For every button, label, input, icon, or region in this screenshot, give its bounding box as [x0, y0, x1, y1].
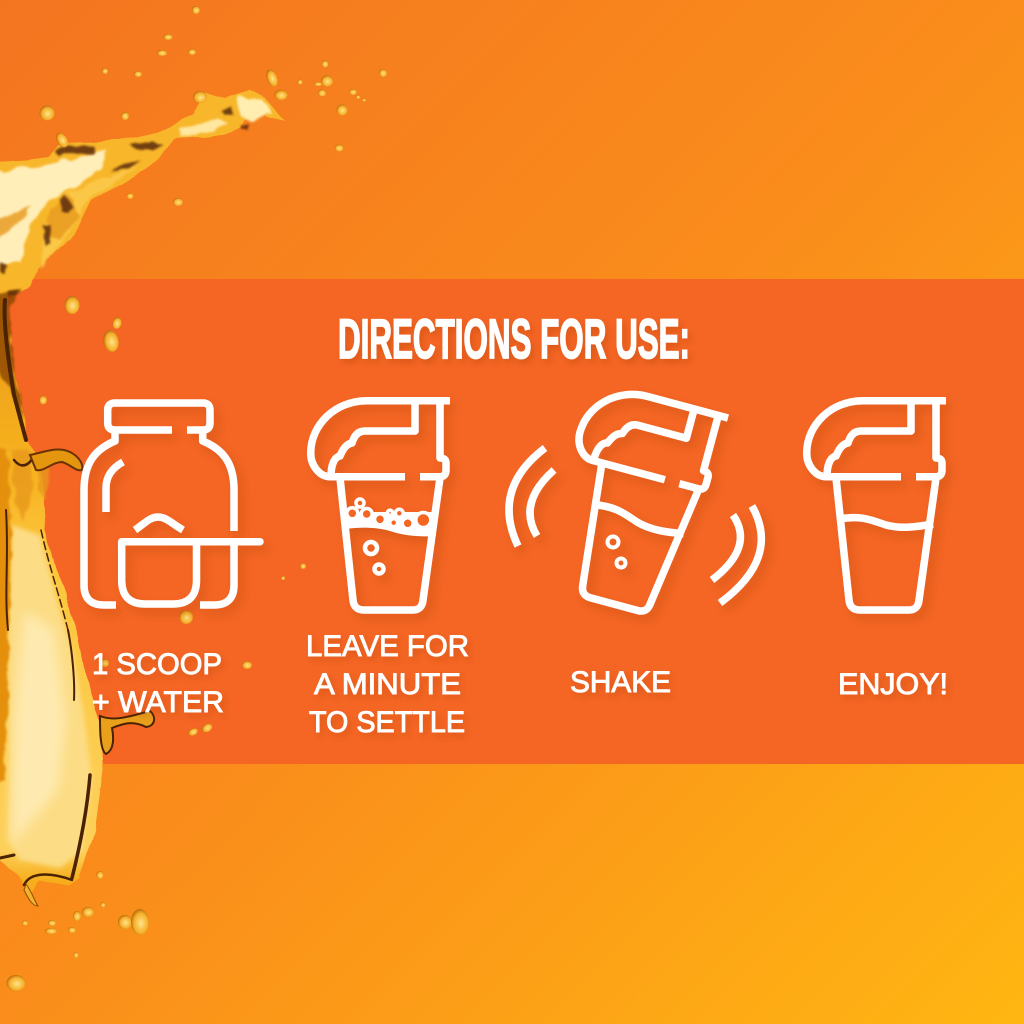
splash: mid stream light — [180, 118, 228, 136]
jar highlight — [106, 462, 123, 512]
title: DIRECTIONS FOR USE: — [338, 307, 690, 370]
splash: neck shadow — [0, 288, 24, 420]
jar body — [84, 430, 234, 605]
splash: dark patches — [0, 105, 247, 298]
banner panel — [0, 279, 1024, 764]
splash: pale highlight — [12, 610, 66, 845]
step 2 label: TO SETTLE — [309, 706, 465, 739]
bubbles — [608, 536, 618, 548]
splash: stream core — [0, 150, 105, 270]
foam bubbles — [347, 508, 431, 529]
liquid splash — [0, 6, 387, 991]
step 4 icon: full shaker — [807, 401, 946, 610]
scoop — [122, 542, 260, 604]
splash: dark streaks — [0, 300, 90, 885]
tilted shaker — [539, 382, 728, 620]
step 1 label — [92, 648, 224, 719]
splash: upper stream — [0, 90, 285, 302]
step 1 icon: jar and scoop — [84, 403, 260, 605]
step 2 label — [306, 630, 469, 739]
step 4 label: ENJOY! — [838, 668, 948, 701]
powder — [135, 517, 183, 530]
splash: stream yellow — [40, 165, 140, 268]
step 1 label: + WATER — [92, 686, 224, 719]
splash: orange marbling — [0, 195, 80, 520]
step 2 label: A MINUTE — [314, 668, 461, 701]
shaker cup — [340, 478, 440, 610]
shaker lid — [311, 401, 450, 477]
splash: tip highlight — [238, 96, 272, 120]
splash: drip — [24, 884, 38, 906]
rising bubbles — [365, 542, 377, 554]
splash: light centre — [8, 525, 92, 868]
step 3 label: SHAKE — [570, 666, 671, 699]
jar lid — [108, 403, 210, 430]
splash: lower tendril — [100, 711, 154, 754]
step 1 label: 1 SCOOP — [92, 648, 222, 681]
top bubble — [356, 499, 364, 507]
splash: side tendril — [30, 449, 82, 470]
splash: left edge streak — [0, 440, 12, 790]
step 3 icon: shaking shaker — [509, 382, 761, 620]
splash: droplets — [6, 6, 387, 991]
splash: base body — [0, 296, 103, 895]
motion arcs — [509, 448, 545, 546]
foam — [345, 512, 436, 536]
step 2 label: LEAVE FOR — [306, 630, 469, 663]
step 2 icon: shaker with foam — [311, 401, 450, 610]
